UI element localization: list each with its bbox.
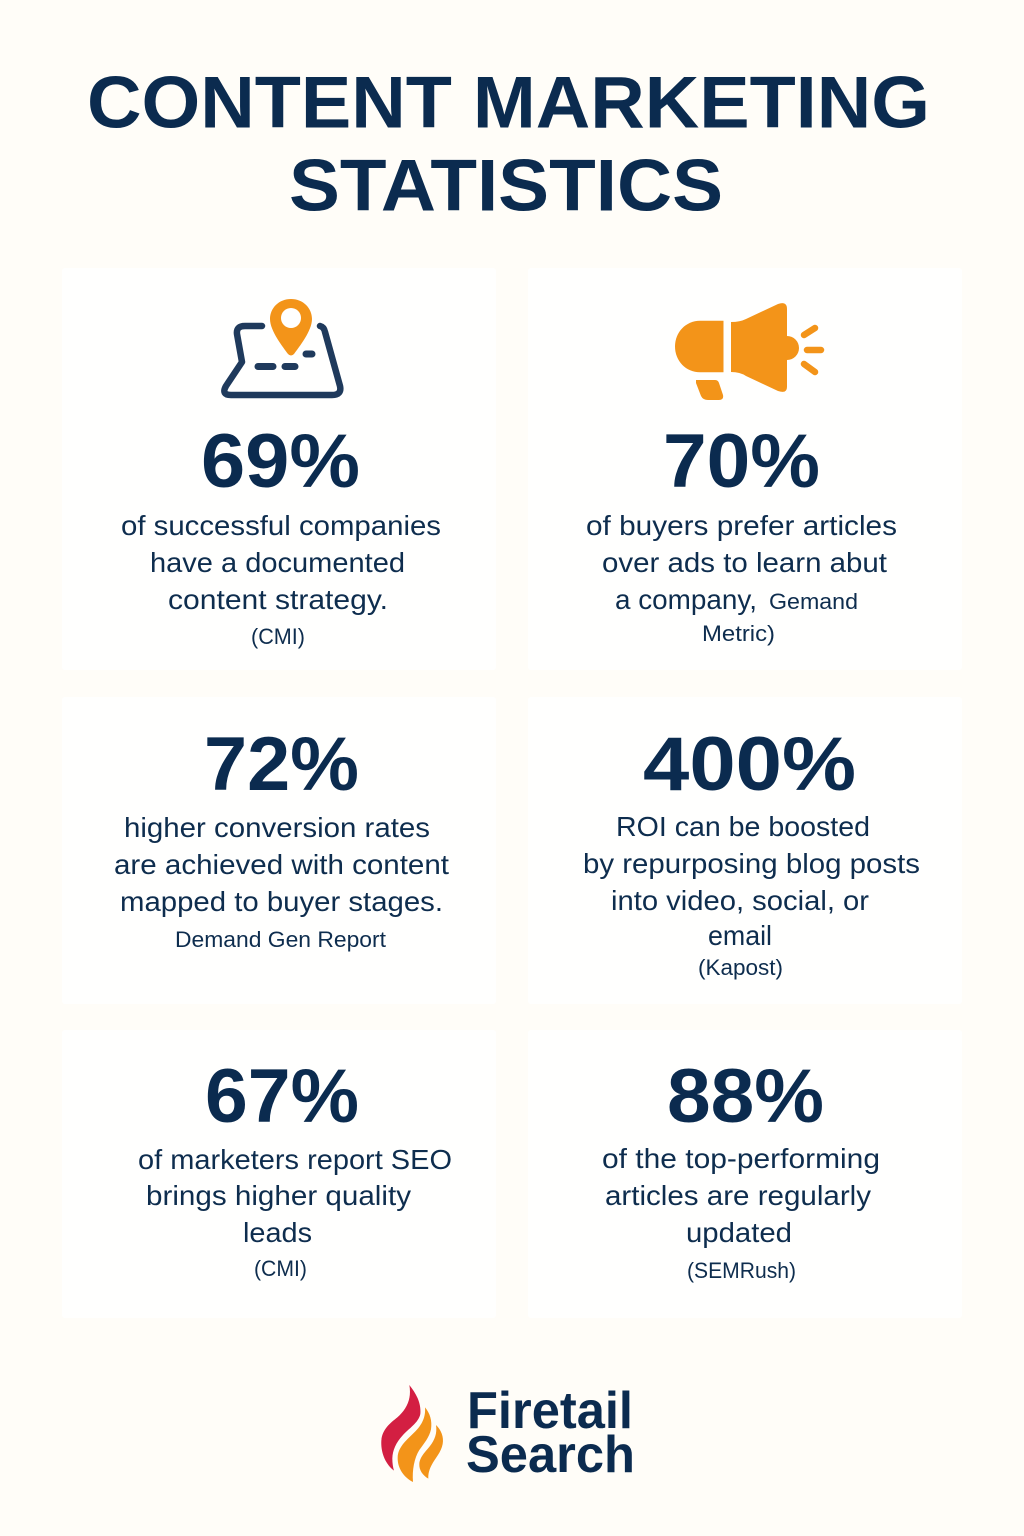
title: CONTENT MARKETING	[87, 60, 930, 144]
description: of the top-performing	[602, 1143, 880, 1174]
description	[586, 510, 897, 615]
panel: 67% SEO leads	[62, 1030, 496, 1318]
description: are achieved with content	[114, 849, 449, 880]
panel: 88% updated articles	[528, 1030, 962, 1318]
panel: 72% conversion rates	[62, 697, 496, 1004]
description: of successful companies	[121, 510, 441, 541]
source	[702, 589, 858, 646]
description: of buyers prefer articles	[586, 510, 897, 541]
source: (Kapost)	[698, 955, 783, 980]
icon: megaphone	[675, 303, 821, 400]
description: by repurposing blog posts	[583, 848, 920, 879]
description	[121, 510, 441, 615]
source: (CMI)	[251, 624, 305, 649]
description: higher conversion rates	[124, 812, 430, 843]
description: a company,	[615, 584, 757, 615]
description	[583, 811, 920, 951]
panel: 400% ROI	[528, 697, 962, 1004]
wordmark	[466, 1382, 635, 1484]
wordmark: Firetail	[467, 1382, 633, 1440]
wordmark: Search	[466, 1426, 635, 1484]
icon: map with location pin	[224, 299, 340, 395]
description: updated	[686, 1217, 792, 1248]
stat: 400%: 400%	[643, 722, 856, 807]
description	[602, 1143, 880, 1248]
description: email	[708, 920, 772, 951]
description	[138, 1144, 452, 1248]
source: Metric)	[702, 621, 775, 646]
logo: Firetail Search	[381, 1382, 635, 1484]
stat: 70%: 70%	[663, 419, 820, 504]
source: Demand Gen Report	[175, 927, 386, 952]
panel: 69% documented strategy	[62, 268, 496, 670]
source: (CMI)	[254, 1256, 307, 1281]
description: content strategy.	[168, 584, 388, 615]
description: ROI can be boosted	[616, 811, 870, 842]
icon: flame	[381, 1385, 443, 1482]
stat: 72%: 72%	[204, 722, 359, 807]
description: brings higher quality	[146, 1180, 411, 1211]
description: into video, social, or	[611, 885, 869, 916]
panel: 70% buyers prefer articles	[528, 268, 962, 670]
stat: 88%: 88%	[667, 1054, 824, 1139]
description	[114, 812, 449, 917]
stat: 67%: 67%	[205, 1054, 359, 1139]
description: mapped to buyer stages.	[120, 886, 443, 917]
description: articles are regularly	[605, 1180, 871, 1211]
title: STATISTICS	[289, 144, 723, 226]
description: have a documented	[150, 547, 405, 578]
description: leads	[243, 1217, 312, 1248]
description: of marketers report SEO	[138, 1144, 452, 1175]
source: Gemand	[769, 589, 858, 614]
source: (SEMRush)	[687, 1258, 796, 1283]
title	[87, 60, 930, 226]
description: over ads to learn abut	[602, 547, 887, 578]
stat: 69%: 69%	[201, 419, 360, 504]
